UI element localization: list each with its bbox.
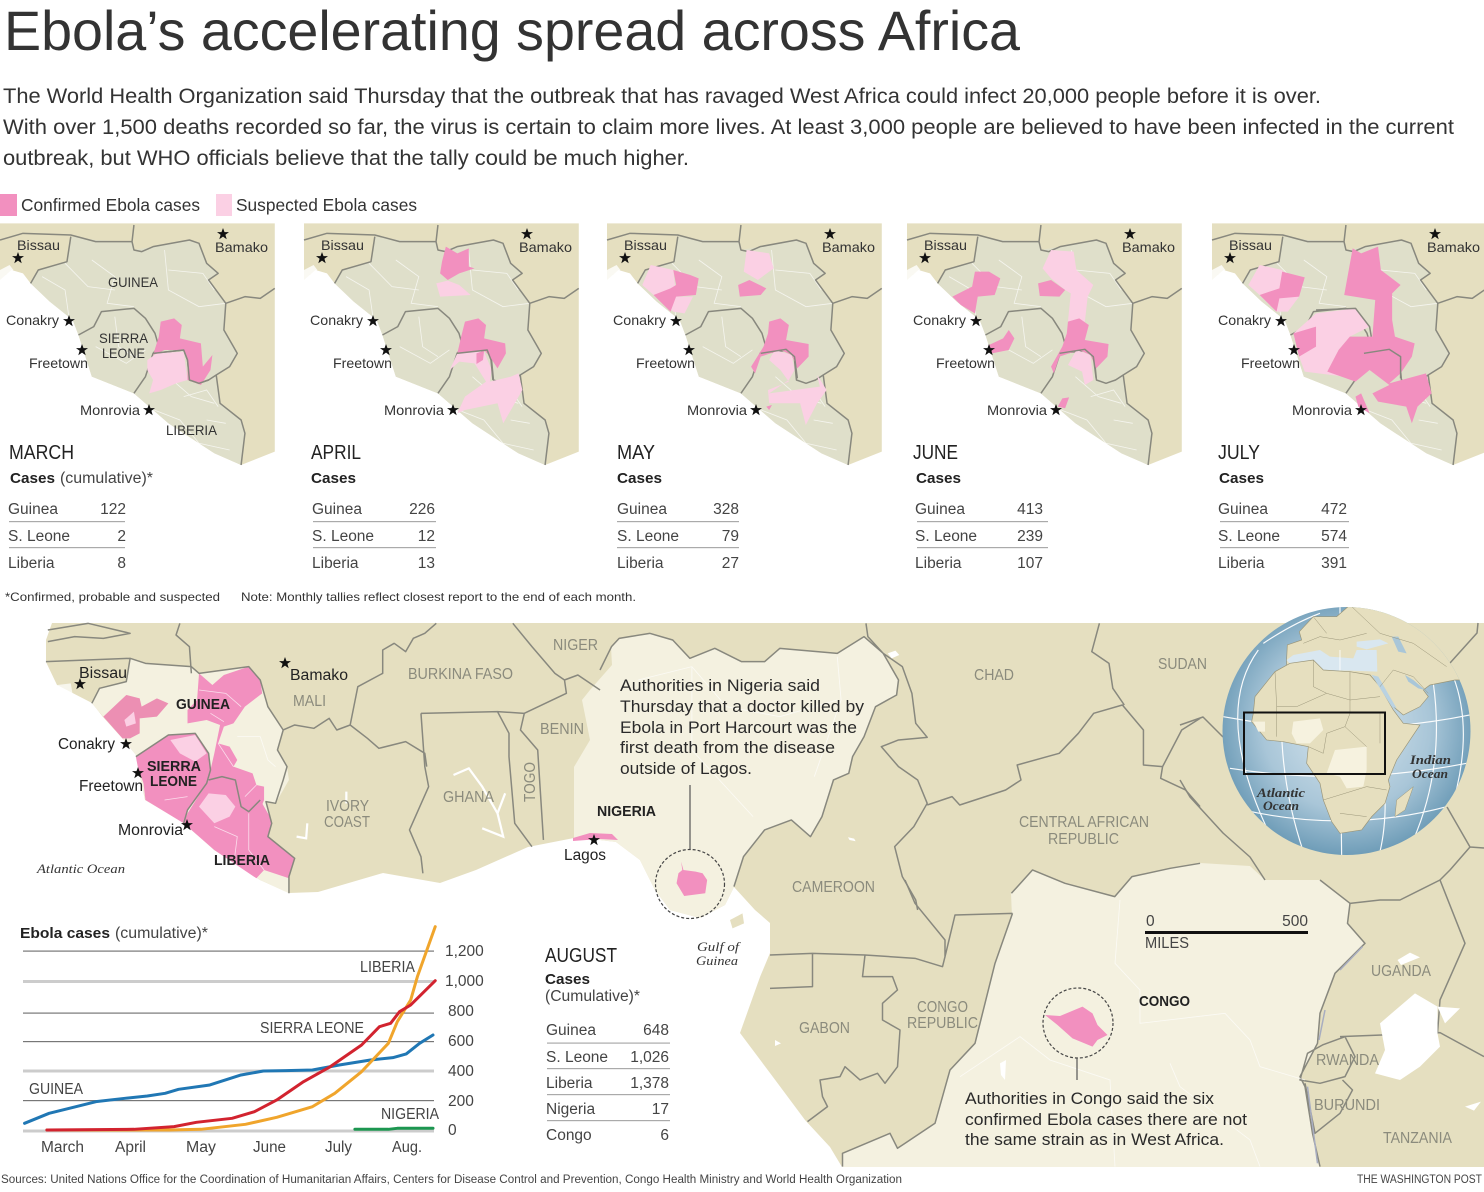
place labels: Gulf of bbox=[697, 939, 742, 954]
table: June cases: Cases bbox=[916, 470, 961, 487]
map: June: Conakry bbox=[913, 312, 966, 328]
table: July cases: Liberia bbox=[1218, 555, 1265, 572]
place labels: TOGO bbox=[522, 762, 539, 802]
table: March cases: (cumulative)* bbox=[60, 470, 153, 487]
Congo bbox=[842, 863, 1365, 1167]
eastern borders bbox=[600, 623, 1200, 910]
x axis months: Aug. bbox=[392, 1139, 422, 1156]
table: March cases: 8 bbox=[117, 555, 126, 572]
place labels: Conakry bbox=[58, 736, 115, 753]
table: July cases: 472 bbox=[1321, 501, 1347, 518]
intro text: outbreak, but WHO officials believe that the tally could be much higher. bbox=[3, 146, 689, 170]
table: June cases: 107 bbox=[1017, 555, 1043, 572]
map: March: Monrovia bbox=[80, 402, 140, 418]
place labels: BURUNDI bbox=[1314, 1097, 1380, 1114]
place labels: BURKINA FASO bbox=[408, 666, 513, 683]
map: July: Bissau bbox=[1229, 237, 1272, 253]
panel: July bbox=[1212, 223, 1484, 572]
callout: Congo: confirmed Ebola cases there are not bbox=[965, 1110, 1247, 1129]
callout: Congo: the same strain as in West Africa. bbox=[965, 1130, 1224, 1149]
y axis values: 600 bbox=[448, 1033, 474, 1050]
table: August cases: Congo bbox=[546, 1127, 592, 1144]
table: April cases: 226 bbox=[409, 501, 435, 518]
table: July cases: S. Leone bbox=[1218, 528, 1280, 545]
chart heading: Ebola cases bbox=[20, 925, 110, 942]
y axis values: 0 bbox=[448, 1122, 457, 1139]
table: June cases: 413 bbox=[1017, 501, 1043, 518]
place labels: Monrovia bbox=[118, 822, 183, 839]
place labels: Atlantic Ocean bbox=[36, 861, 125, 876]
x axis months: April bbox=[115, 1139, 146, 1156]
map: May: Bissau bbox=[624, 237, 667, 253]
place labels: GHANA bbox=[443, 789, 495, 806]
callout: Nigeria: Ebola in Port Harcourt was the bbox=[620, 718, 857, 737]
place labels: NIGER bbox=[553, 637, 598, 654]
table: August cases: Nigeria bbox=[546, 1101, 595, 1118]
place labels: CONGO bbox=[1139, 993, 1190, 1010]
line labels: GUINEA bbox=[29, 1081, 84, 1098]
map: March: SIERRA bbox=[99, 330, 149, 346]
panel: March bbox=[0, 223, 275, 572]
table: May cases: Liberia bbox=[617, 555, 664, 572]
table: July cases: 391 bbox=[1321, 555, 1347, 572]
place labels: CENTRAL AFRICAN bbox=[1019, 814, 1149, 831]
map: April: Monrovia bbox=[384, 402, 444, 418]
table: August cases: AUGUST bbox=[545, 945, 617, 967]
line labels: NIGERIA bbox=[381, 1106, 440, 1123]
place labels: Freetown bbox=[79, 778, 143, 795]
y axis values: 800 bbox=[448, 1003, 474, 1020]
table: June cases: Guinea bbox=[915, 501, 965, 518]
map: March: Bamako bbox=[215, 239, 268, 255]
table: August cases: Cases bbox=[545, 971, 590, 988]
footnotes bbox=[5, 590, 636, 604]
map: April: Bissau bbox=[321, 237, 364, 253]
x axis months: March bbox=[41, 1139, 84, 1156]
map: April: Freetown bbox=[333, 355, 392, 371]
locator globe: Ocean bbox=[1263, 798, 1299, 813]
place labels: Bamako bbox=[290, 667, 348, 684]
table: June cases: 239 bbox=[1017, 528, 1043, 545]
map: March: Conakry bbox=[6, 312, 59, 328]
place labels: REPUBLIC bbox=[1048, 831, 1119, 848]
table: August cases: 6 bbox=[660, 1127, 669, 1144]
table: May cases: 79 bbox=[722, 528, 739, 545]
table: August cases bbox=[545, 945, 670, 1144]
map: June: Freetown bbox=[936, 355, 995, 371]
place labels: LIBERIA bbox=[214, 852, 270, 869]
intro text: The World Health Organization said Thursday that the outbreak that has ravaged West Africa could infect 20,000 people before it is over. bbox=[3, 84, 1321, 108]
sources: Sources: United Nations Office for the Coordination of Humanitarian Affairs, Centers for Disease Control and Prevention, Congo Health Ministry and World Health Organization bbox=[1, 1174, 902, 1186]
place labels: Bissau bbox=[79, 665, 127, 682]
place labels: CAMEROON bbox=[792, 879, 875, 896]
table: August cases: 17 bbox=[652, 1101, 669, 1118]
table: June cases: S. Leone bbox=[915, 528, 977, 545]
place labels: Lagos bbox=[564, 847, 606, 864]
place labels: Guinea bbox=[696, 953, 739, 968]
table: March cases: Liberia bbox=[8, 555, 55, 572]
table: April cases: Cases bbox=[311, 470, 356, 487]
map: April: Conakry bbox=[310, 312, 363, 328]
main map: West and Central Africa bbox=[46, 623, 1484, 1167]
heading: March: MARCH bbox=[9, 442, 74, 464]
map: May: Monrovia bbox=[687, 402, 747, 418]
Guinea, Sierra Leone and Liberia bbox=[46, 623, 600, 893]
table: March cases: 2 bbox=[117, 528, 126, 545]
callout: Nigeria: Authorities in Nigeria said bbox=[620, 676, 820, 695]
map: April: Bamako bbox=[519, 239, 572, 255]
place labels: SUDAN bbox=[1158, 656, 1207, 673]
legend: Confirmed Ebola cases bbox=[21, 195, 200, 215]
table: May cases: Cases bbox=[617, 470, 662, 487]
callout: Congo bbox=[965, 988, 1247, 1149]
callout: Nigeria: Thursday that a doctor killed by bbox=[620, 697, 865, 716]
table: April cases: Guinea bbox=[312, 501, 362, 518]
map: March: Freetown bbox=[29, 355, 88, 371]
map: July: Conakry bbox=[1218, 312, 1271, 328]
place labels: TANZANIA bbox=[1383, 1130, 1453, 1147]
southern borders and lakes bbox=[730, 880, 1484, 1167]
heading: April: APRIL bbox=[311, 442, 361, 464]
y axis values bbox=[445, 943, 484, 1139]
legend: Suspected Ebola cases bbox=[236, 195, 417, 215]
line labels bbox=[29, 959, 440, 1123]
table: March cases: 122 bbox=[100, 501, 126, 518]
table: May cases bbox=[617, 470, 739, 572]
map: July: Monrovia bbox=[1292, 402, 1352, 418]
table: May cases: 328 bbox=[713, 501, 739, 518]
callout: Congo: Authorities in Congo said the six bbox=[965, 1089, 1215, 1108]
place labels: SIERRA bbox=[147, 758, 201, 775]
x axis months bbox=[41, 1139, 422, 1156]
map: July: Bamako bbox=[1427, 239, 1480, 255]
locator globe: Indian bbox=[1409, 752, 1451, 767]
place labels: IVORY bbox=[326, 798, 369, 815]
map: April bbox=[304, 223, 579, 465]
map: June: Bissau bbox=[924, 237, 967, 253]
table: April cases: 12 bbox=[418, 528, 435, 545]
map: May: Freetown bbox=[636, 355, 695, 371]
map: June bbox=[907, 223, 1182, 465]
land base bbox=[46, 623, 1484, 1167]
scale bar: 0 bbox=[1146, 913, 1155, 930]
table: March cases bbox=[8, 470, 153, 572]
Nigeria bbox=[574, 633, 898, 918]
panel: June bbox=[907, 223, 1182, 572]
footnotes: Note: Monthly tallies reflect closest report to the end of each month. bbox=[241, 590, 636, 604]
table: March cases: S. Leone bbox=[8, 528, 70, 545]
table: July cases: Guinea bbox=[1218, 501, 1268, 518]
chart heading: (cumulative)* bbox=[115, 925, 208, 942]
map: May: Bamako bbox=[822, 239, 875, 255]
place labels: RWANDA bbox=[1316, 1052, 1380, 1069]
line labels: LIBERIA bbox=[360, 959, 416, 976]
table: August cases: S. Leone bbox=[546, 1049, 608, 1066]
remaining eastern borders bbox=[1180, 623, 1484, 880]
table: March cases: Cases bbox=[10, 470, 55, 487]
place labels: LEONE bbox=[150, 773, 197, 790]
footnotes: *Confirmed, probable and suspected bbox=[5, 590, 220, 604]
title: Ebola’s accelerating spread across Africa bbox=[4, 0, 1021, 62]
table: August cases: 1,378 bbox=[630, 1075, 669, 1092]
place labels bbox=[36, 637, 1453, 1147]
place labels: MALI bbox=[293, 693, 326, 710]
x axis months: June bbox=[253, 1139, 286, 1156]
heading: June: JUNE bbox=[913, 442, 958, 464]
heading: May: MAY bbox=[617, 442, 655, 464]
intro text bbox=[3, 84, 1454, 170]
table: July cases: 574 bbox=[1321, 528, 1347, 545]
scale bar: MILES bbox=[1145, 935, 1189, 952]
intro text: With over 1,500 deaths recorded so far, the virus is certain to claim more lives. At least 3,000 people are believed to have been infected in the current bbox=[3, 115, 1454, 139]
x axis months: May bbox=[186, 1139, 216, 1156]
y axis values: 200 bbox=[448, 1093, 474, 1110]
y axis values: 1,000 bbox=[445, 973, 484, 990]
place labels: REPUBLIC bbox=[907, 1015, 978, 1032]
heading: July: JULY bbox=[1218, 442, 1260, 464]
locator globe bbox=[1222, 603, 1480, 857]
y axis values: 400 bbox=[448, 1063, 474, 1080]
callout: Nigeria: outside of Lagos. bbox=[620, 759, 752, 778]
map: March: Bissau bbox=[17, 237, 60, 253]
data lines bbox=[25, 927, 435, 1130]
legend bbox=[0, 194, 417, 216]
table: July cases bbox=[1218, 470, 1349, 572]
line chart: Ebola cases bbox=[20, 925, 484, 1156]
capital stars bbox=[74, 657, 600, 845]
table: August cases: 1,026 bbox=[630, 1049, 669, 1066]
map: May: Conakry bbox=[613, 312, 666, 328]
map: July bbox=[1212, 223, 1484, 465]
map: June: Bamako bbox=[1122, 239, 1175, 255]
table: August cases: Guinea bbox=[546, 1022, 596, 1039]
place labels: UGANDA bbox=[1371, 963, 1432, 980]
table: April cases: 13 bbox=[418, 555, 435, 572]
place labels: BENIN bbox=[540, 721, 584, 738]
locator globe: Atlantic bbox=[1256, 785, 1305, 800]
table: June cases bbox=[915, 470, 1048, 572]
callout: Nigeria: first death from the disease bbox=[620, 738, 835, 757]
table: May cases: S. Leone bbox=[617, 528, 679, 545]
place labels: NIGERIA bbox=[597, 803, 656, 820]
map: May bbox=[607, 223, 882, 465]
Lagos pink area bbox=[573, 833, 618, 841]
table: August cases: Liberia bbox=[546, 1075, 593, 1092]
scale bar bbox=[1145, 913, 1308, 952]
panel: April bbox=[304, 223, 579, 572]
map: March: GUINEA bbox=[108, 274, 159, 290]
scale bar: 500 bbox=[1282, 913, 1308, 930]
table: May cases: 27 bbox=[722, 555, 739, 572]
place labels: COAST bbox=[324, 814, 370, 831]
table: August cases: 648 bbox=[643, 1022, 669, 1039]
table: May cases: Guinea bbox=[617, 501, 667, 518]
line labels: SIERRA LEONE bbox=[260, 1020, 364, 1037]
chart heading bbox=[20, 925, 208, 942]
map: March: LEONE bbox=[102, 345, 145, 361]
map: March: LIBERIA bbox=[166, 422, 218, 438]
place labels: GUINEA bbox=[176, 696, 230, 713]
table: April cases: Liberia bbox=[312, 555, 359, 572]
map: July: Freetown bbox=[1241, 355, 1300, 371]
callout: Nigeria bbox=[620, 676, 865, 918]
place labels: CONGO bbox=[917, 999, 968, 1016]
map: March bbox=[0, 223, 275, 465]
x axis months: July bbox=[325, 1139, 352, 1156]
y axis values: 1,200 bbox=[445, 943, 484, 960]
table: April cases: S. Leone bbox=[312, 528, 374, 545]
map: June: Monrovia bbox=[987, 402, 1047, 418]
table: July cases: Cases bbox=[1219, 470, 1264, 487]
place labels: CHAD bbox=[974, 667, 1014, 684]
locator globe: Ocean bbox=[1412, 766, 1448, 781]
table: June cases: Liberia bbox=[915, 555, 962, 572]
place labels: GABON bbox=[799, 1020, 850, 1037]
panel: May bbox=[607, 223, 882, 572]
table: April cases bbox=[311, 470, 436, 572]
table: March cases: Guinea bbox=[8, 501, 58, 518]
table: August cases: (Cumulative)* bbox=[545, 988, 640, 1005]
